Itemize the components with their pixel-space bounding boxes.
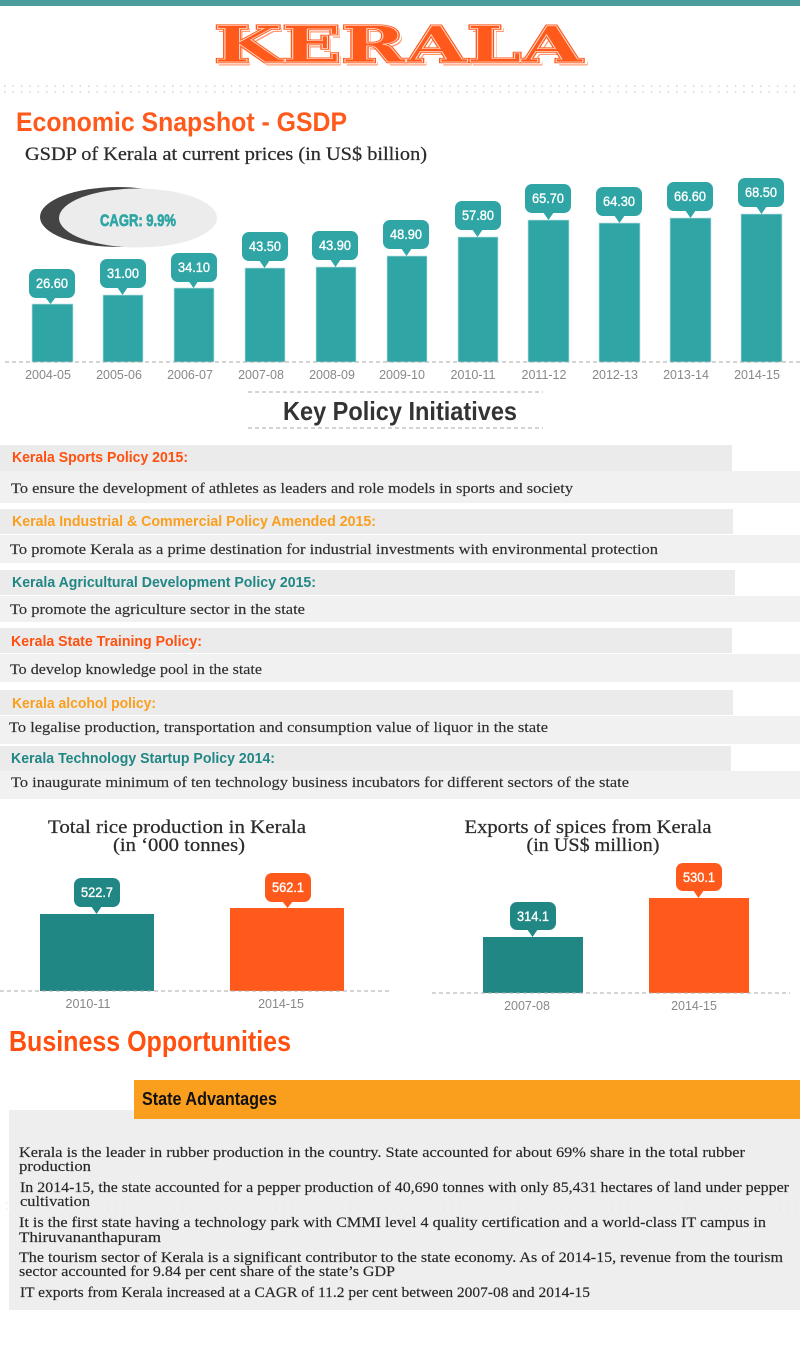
policy: industrial xyxy=(0,509,800,563)
bar chart: GSDP: 34.10 xyxy=(178,259,210,275)
bar chart: GSDP: 2010-11 xyxy=(451,368,496,382)
bar chart: GSDP: 2008-09 xyxy=(309,368,355,382)
bar chart: GSDP: 2011-12 xyxy=(522,368,567,382)
bar chart: GSDP: 2012-13 xyxy=(592,368,638,382)
chart: rice production: 522.7 xyxy=(81,884,113,900)
bar chart: GSDP: 2009-10 xyxy=(379,368,425,382)
policy: agricultural: Kerala Agricultural Development Policy 2015: xyxy=(12,575,316,591)
policy: sports: Kerala Sports Policy 2015: xyxy=(12,450,188,466)
policy: technology startup: Kerala Technology Startup Policy 2014: xyxy=(11,751,275,767)
chart: spice exports xyxy=(432,817,790,1013)
chart: rice production: (in ‘000 tonnes) xyxy=(113,835,245,856)
title: KERALA xyxy=(216,18,588,77)
panel: state advantages xyxy=(6,1080,800,1310)
chart: rice production: 562.1 xyxy=(272,879,304,895)
advantage: pepper: In 2014-15, the state accounted for a pepper production of 40,690 tonnes with only 85,431 hectares of land under pepper xyxy=(20,1180,789,1196)
chart: rice production: Total rice production in Kerala xyxy=(48,817,307,838)
bar chart: GSDP: 65.70 xyxy=(532,190,564,206)
bar chart: GSDP: 64.30 xyxy=(603,193,635,209)
advantage: IT exports: IT exports from Kerala increased at a CAGR of 11.2 per cent between 2007-08 and 2014-15 xyxy=(20,1285,590,1301)
advantage: technology park: It is the first state having a technology park with CMMI level 4 quality certification and a world-class IT campus in xyxy=(19,1215,767,1231)
bar chart: GSDP: 2004-05 xyxy=(25,368,71,382)
title xyxy=(214,15,588,77)
chart: rice production xyxy=(0,817,390,1011)
panel header xyxy=(134,1080,800,1119)
heading: economic snapshot: Economic Snapshot - GSDP xyxy=(16,107,347,137)
policy: industrial: To promote Kerala as a prime destination for industrial investments with environmental protection xyxy=(10,542,659,558)
advantage: rubber: Kerala is the leader in rubber production in the country. State accounted for about 69% share in the total rubber xyxy=(19,1145,745,1161)
bar chart: GSDP: 2006-07 xyxy=(167,368,213,382)
policy: alcohol: Kerala alcohol policy: xyxy=(12,696,156,712)
chart: rice production: 2014-15 xyxy=(258,997,304,1011)
chart: rice production: 2010-11 xyxy=(66,997,111,1011)
chart: spice exports: 2014-15 xyxy=(671,999,717,1013)
chart: spice exports: 314.1 xyxy=(517,908,549,924)
bar chart: GSDP: 31.00 xyxy=(107,265,139,281)
bar chart: GSDP: 2014-15 xyxy=(734,368,780,382)
policy: industrial: Kerala Industrial & Commercial Policy Amended 2015: xyxy=(12,514,376,530)
policy: training: To develop knowledge pool in the state xyxy=(10,662,262,678)
title: KERALA xyxy=(215,16,587,76)
bar chart: GSDP: 66.60 xyxy=(674,188,706,204)
advantage: tourism: sector accounted for 9.84 per cent share of the state’s GDP xyxy=(19,1264,395,1280)
chart: spice exports: 2007-08 xyxy=(504,999,550,1013)
policy: sports: To ensure the development of athletes as leaders and role models in sports and society xyxy=(11,481,574,497)
policy: sports xyxy=(0,445,800,503)
policy: training: Kerala State Training Policy: xyxy=(11,634,202,650)
heading: business opportunities: Business Opportunities xyxy=(9,1026,291,1058)
panel header: State Advantages xyxy=(142,1089,277,1109)
bar chart: GSDP: 2005-06 xyxy=(96,368,142,382)
policy: training xyxy=(0,628,800,682)
chart title: GSDP: GSDP of Kerala at current prices (in US$ billion) xyxy=(25,144,427,165)
bar chart: GSDP: 2013-14 xyxy=(663,368,709,382)
bar chart: GSDP: 2007-08 xyxy=(238,368,284,382)
bar chart: GSDP: 43.50 xyxy=(249,238,281,254)
chart: spice exports: Exports of spices from Kerala xyxy=(464,817,712,838)
policy: alcohol: To legalise production, transportation and consumption value of liquor in the state xyxy=(9,720,548,736)
advantage: technology park: Thiruvananthapuram xyxy=(19,1230,161,1246)
title: KERALA xyxy=(214,15,584,74)
advantage: pepper: cultivation xyxy=(20,1194,91,1210)
bar chart: GSDP: 68.50 xyxy=(745,184,777,200)
bar chart: GSDP: 26.60 xyxy=(36,275,68,291)
callout: CAGR xyxy=(40,187,217,248)
policy: agricultural xyxy=(0,570,800,622)
title: KERALA xyxy=(214,15,584,74)
advantage: tourism: The tourism sector of Kerala is a significant contributor to the state economy. As of 2014-15, revenue from the tourism xyxy=(19,1250,783,1266)
bar chart: GSDP xyxy=(5,178,800,382)
bar chart: GSDP: 48.90 xyxy=(390,226,422,242)
bar chart: GSDP: 43.90 xyxy=(319,237,351,253)
bar chart: GSDP: 57.80 xyxy=(462,207,494,223)
policy: technology startup xyxy=(0,746,800,799)
chart: spice exports: 530.1 xyxy=(683,869,715,885)
advantage: rubber: production xyxy=(19,1159,92,1175)
top band xyxy=(0,0,800,6)
heading: key policy initiatives: Key Policy Initiatives xyxy=(283,396,517,426)
policy: alcohol xyxy=(0,690,800,744)
chart: spice exports: (in US$ million) xyxy=(526,835,660,856)
policy: agricultural: To promote the agriculture sector in the state xyxy=(10,602,305,618)
callout: CAGR: CAGR: 9.9% xyxy=(100,211,176,230)
policy: technology startup: To inaugurate minimum of ten technology business incubators for different sectors of the state xyxy=(11,775,629,791)
